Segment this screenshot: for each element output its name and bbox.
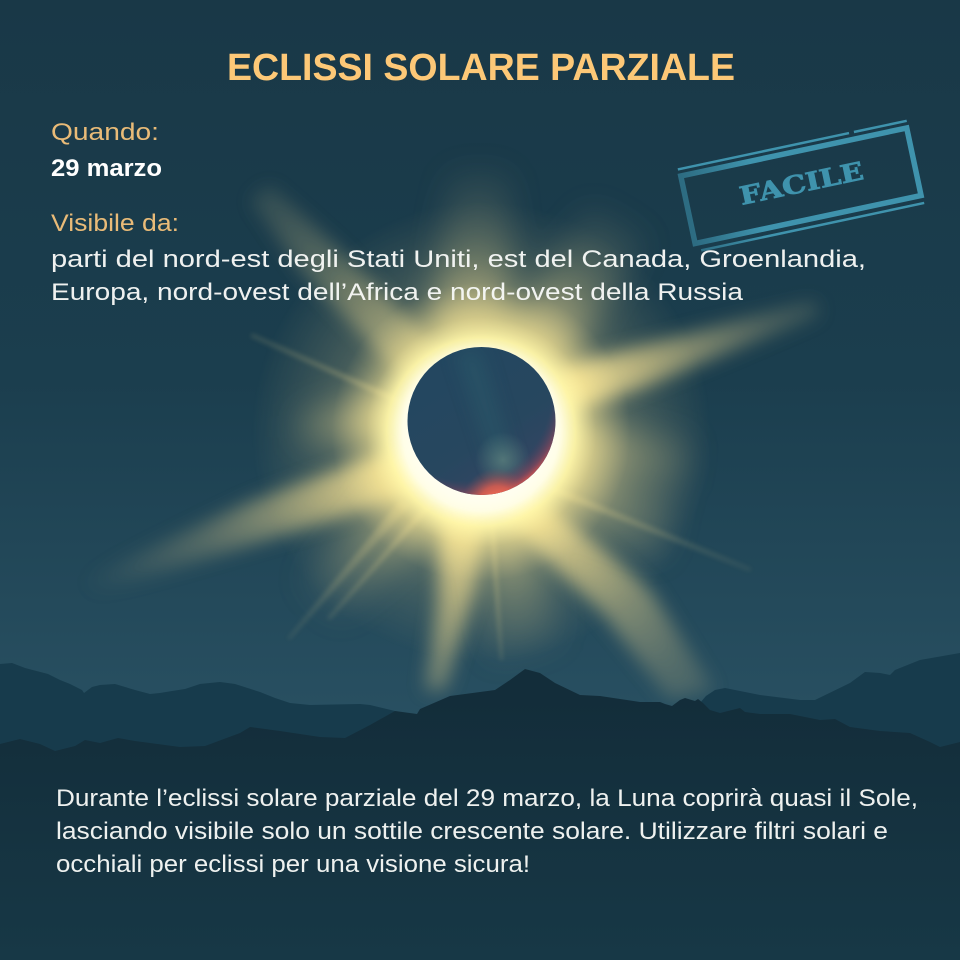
visibility line 1: parti del nord-est degli Stati Uniti, est del Canada, Groenlandia, <box>51 246 866 273</box>
description line 1: Durante l’eclissi solare parziale del 29 marzo, la Luna coprirà quasi il Sole, <box>56 785 918 812</box>
visibility line 2: Europa, nord-ovest dell’Africa e nord-ovest della Russia <box>51 279 744 306</box>
description line 3: occhiali per eclissi per una visione sicura! <box>56 851 530 878</box>
stamp top line <box>678 121 907 169</box>
central glow <box>251 202 711 662</box>
date: 29 marzo <box>51 155 162 182</box>
block: quando <box>51 119 162 182</box>
label: quando: Quando: <box>51 119 159 146</box>
back mountain range right <box>700 653 960 760</box>
stamp text: FACILE <box>737 156 866 211</box>
bright rim <box>403 352 559 508</box>
description text <box>56 785 918 878</box>
front mountain range and lower panel <box>0 669 960 960</box>
label: visibile da: Visibile da: <box>51 210 179 237</box>
main long rays <box>60 185 820 700</box>
thin streaks <box>250 333 752 660</box>
back mountain range left <box>0 663 420 760</box>
stamp: facile <box>678 121 924 252</box>
description line 2: lasciando visibile solo un sottile crescente solare. Utilizzare filtri solari e <box>56 818 888 845</box>
solar corona rays <box>60 170 820 700</box>
short wide rays <box>300 170 690 660</box>
title: ECLISSI SOLARE PARZIALE <box>227 47 735 89</box>
moon disc <box>408 347 556 495</box>
stamp bottom line <box>701 203 924 250</box>
stamp frame <box>681 128 921 243</box>
block: visibile da <box>51 210 866 306</box>
